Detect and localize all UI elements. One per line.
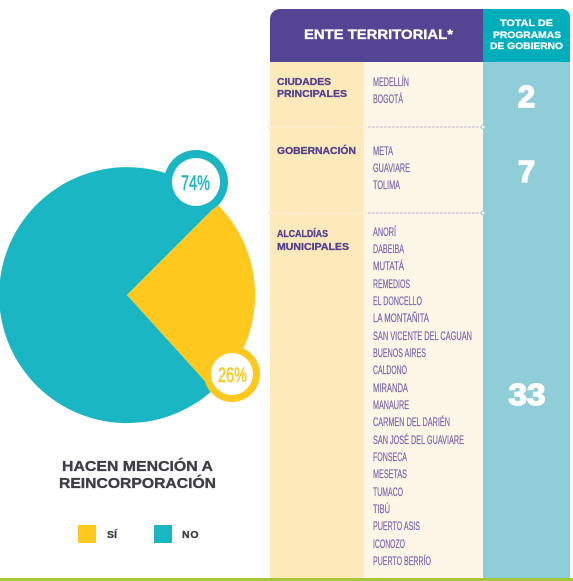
- row: gobernacion: GUAVIARE: [373, 163, 410, 175]
- header: total de programas de gobierno: TOTAL DE: [500, 18, 553, 29]
- row: gobernacion: META: [373, 146, 393, 158]
- row: ciudades principales: BOGOTÁ: [373, 93, 403, 106]
- row: alcaldias municipales: EL DONCELLO: [373, 296, 422, 308]
- row: alcaldias municipales: REMEDIOS: [373, 279, 410, 291]
- header: total de programas de gobierno: [483, 9, 570, 62]
- row: alcaldias municipales: PUERTO BERRÍO: [373, 555, 431, 568]
- chart title: HACEN MENCIÓN A: [62, 457, 213, 475]
- row: gobernacion: TOLIMA: [373, 180, 400, 192]
- row: alcaldias municipales: CARMEN DEL DARIÉN: [373, 416, 450, 429]
- row: gobernacion: [277, 144, 535, 192]
- row: ciudades principales: [277, 76, 535, 114]
- row: alcaldias municipales: 33: [508, 377, 546, 412]
- pie chart: [0, 150, 260, 423]
- row: ciudades principales: PRINCIPALES: [277, 88, 347, 100]
- chart title: [59, 457, 216, 492]
- row: alcaldias municipales: DABEIBA: [373, 244, 404, 256]
- callout: 74%: 74%: [181, 172, 210, 195]
- row: ciudades principales: 2: [518, 79, 535, 114]
- callout: 74%: [164, 150, 228, 214]
- header: total de programas de gobierno: PROGRAMAS: [493, 30, 561, 41]
- row: alcaldias municipales: BUENOS AIRES: [373, 348, 426, 360]
- row: alcaldias municipales: FONSECA: [373, 452, 407, 464]
- row: gobernacion: 7: [518, 154, 535, 189]
- legend: NO: [182, 529, 198, 541]
- row: alcaldias municipales: PUERTO ASIS: [373, 521, 420, 533]
- header: total de programas de gobierno: DE GOBIERNO: [490, 41, 563, 52]
- row: ciudades principales: CIUDADES: [277, 76, 331, 88]
- row: alcaldias municipales: MANAURE: [373, 400, 409, 412]
- header: ente territorial: ENTE TERRITORIAL*: [304, 27, 454, 42]
- pie slice: si 26%: [127, 204, 255, 390]
- row: alcaldias municipales: ANORÍ: [373, 226, 397, 239]
- row: alcaldias municipales: MUTATÁ: [373, 260, 404, 273]
- chart title: REINCORPORACIÓN: [59, 474, 216, 492]
- row: alcaldias municipales: SAN VICENTE DEL CAGUAN: [373, 331, 472, 343]
- row: gobernacion: GOBERNACIÓN: [277, 144, 356, 157]
- row: alcaldias municipales: MIRANDA: [373, 383, 408, 395]
- bottom border: [0, 578, 573, 581]
- row: alcaldias municipales: TIBÚ: [373, 503, 390, 516]
- row: alcaldias municipales: ALCALDÍAS: [277, 227, 328, 240]
- legend: [78, 525, 198, 543]
- header: ente territorial: [270, 9, 483, 62]
- callout: 26%: [204, 346, 260, 402]
- row: alcaldias municipales: LA MONTAÑITA: [373, 312, 429, 325]
- row: alcaldias municipales: MUNICIPALES: [277, 241, 349, 253]
- row dividers: [268, 125, 485, 215]
- legend: SÍ: [107, 528, 118, 541]
- table: [268, 9, 570, 578]
- pie slice: no 74%: [0, 167, 217, 423]
- callout: 26%: 26%: [218, 364, 247, 387]
- row: alcaldias municipales: SAN JOSÉ DEL GUAVIARE: [373, 434, 464, 447]
- row: alcaldias municipales: TUMACO: [373, 487, 403, 499]
- row: ciudades principales: MEDELLÍN: [373, 76, 409, 89]
- row: alcaldias municipales: MESETAS: [373, 469, 407, 481]
- row: alcaldias municipales: [277, 226, 546, 568]
- row: alcaldias municipales: CALDONO: [373, 365, 407, 377]
- column backgrounds: [270, 62, 570, 578]
- row: alcaldias municipales: ICONOZO: [373, 539, 405, 551]
